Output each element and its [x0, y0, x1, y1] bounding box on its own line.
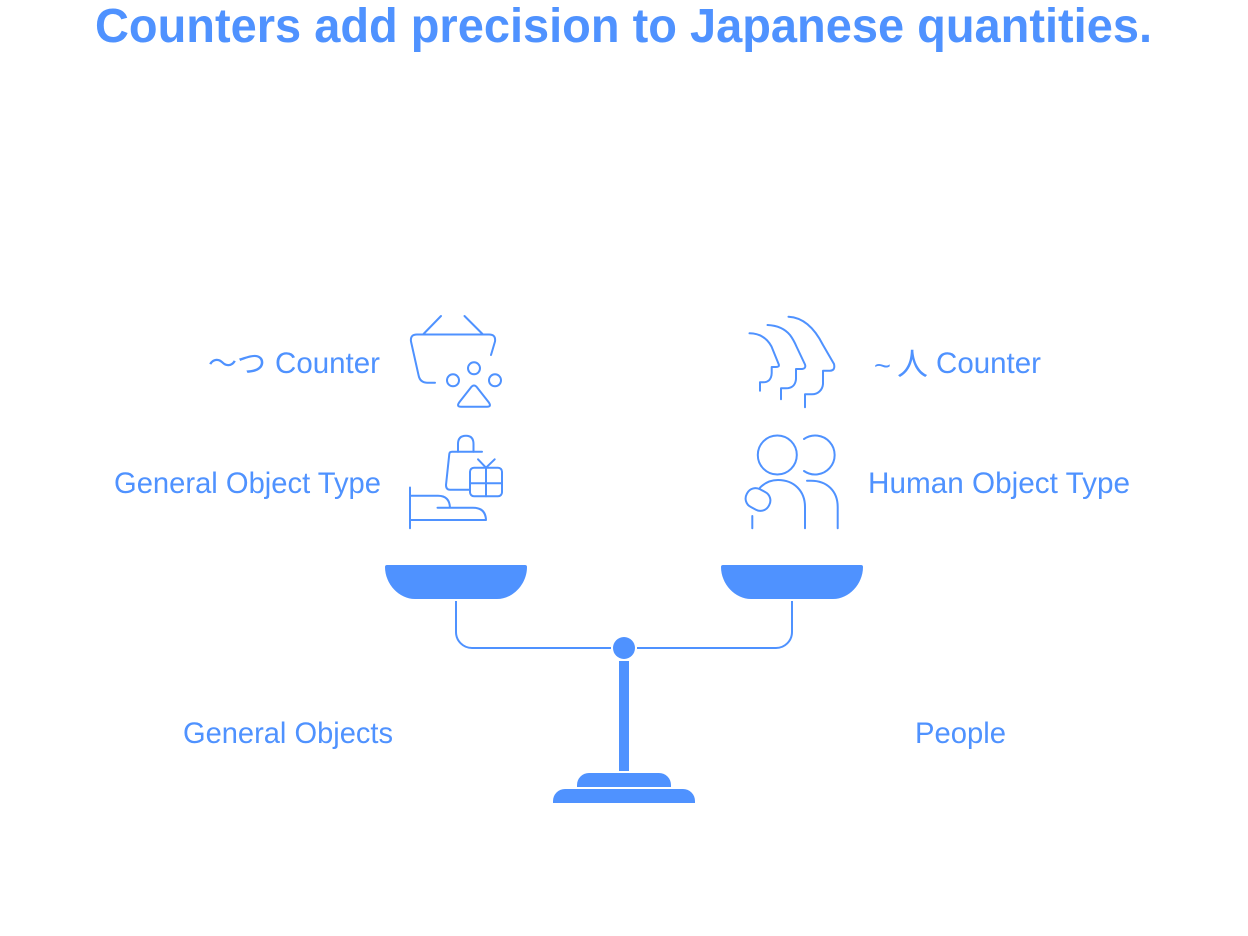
label: hito counter: 人 [897, 347, 928, 382]
label: general object type: General Object Type [114, 467, 381, 500]
scale: pivot [613, 637, 635, 659]
scale: left pan [385, 565, 527, 599]
label: hito counter [874, 347, 1041, 382]
label: tsu counter [208, 347, 380, 380]
label: general objects: General Objects [183, 717, 393, 750]
icon: two people with hand [742, 436, 838, 528]
icon: three head profiles [750, 317, 834, 407]
scale: stem [619, 661, 629, 771]
label: hito counter: ~ [874, 350, 891, 381]
title: Counters add precision to Japanese quantities. [95, 0, 1152, 53]
icon: hand with shopping bag and gift [410, 436, 502, 528]
label: tsu counter: Counter [275, 347, 380, 380]
label: tsu counter: 〜つ [208, 348, 266, 379]
scale: base [553, 773, 695, 803]
scale: right pan [721, 565, 863, 599]
label: hito counter: Counter [936, 347, 1041, 380]
icon: basket with shapes [411, 316, 501, 407]
scale: beam [456, 601, 792, 648]
label: people: People [915, 717, 1006, 750]
label: human object type: Human Object Type [868, 467, 1130, 500]
